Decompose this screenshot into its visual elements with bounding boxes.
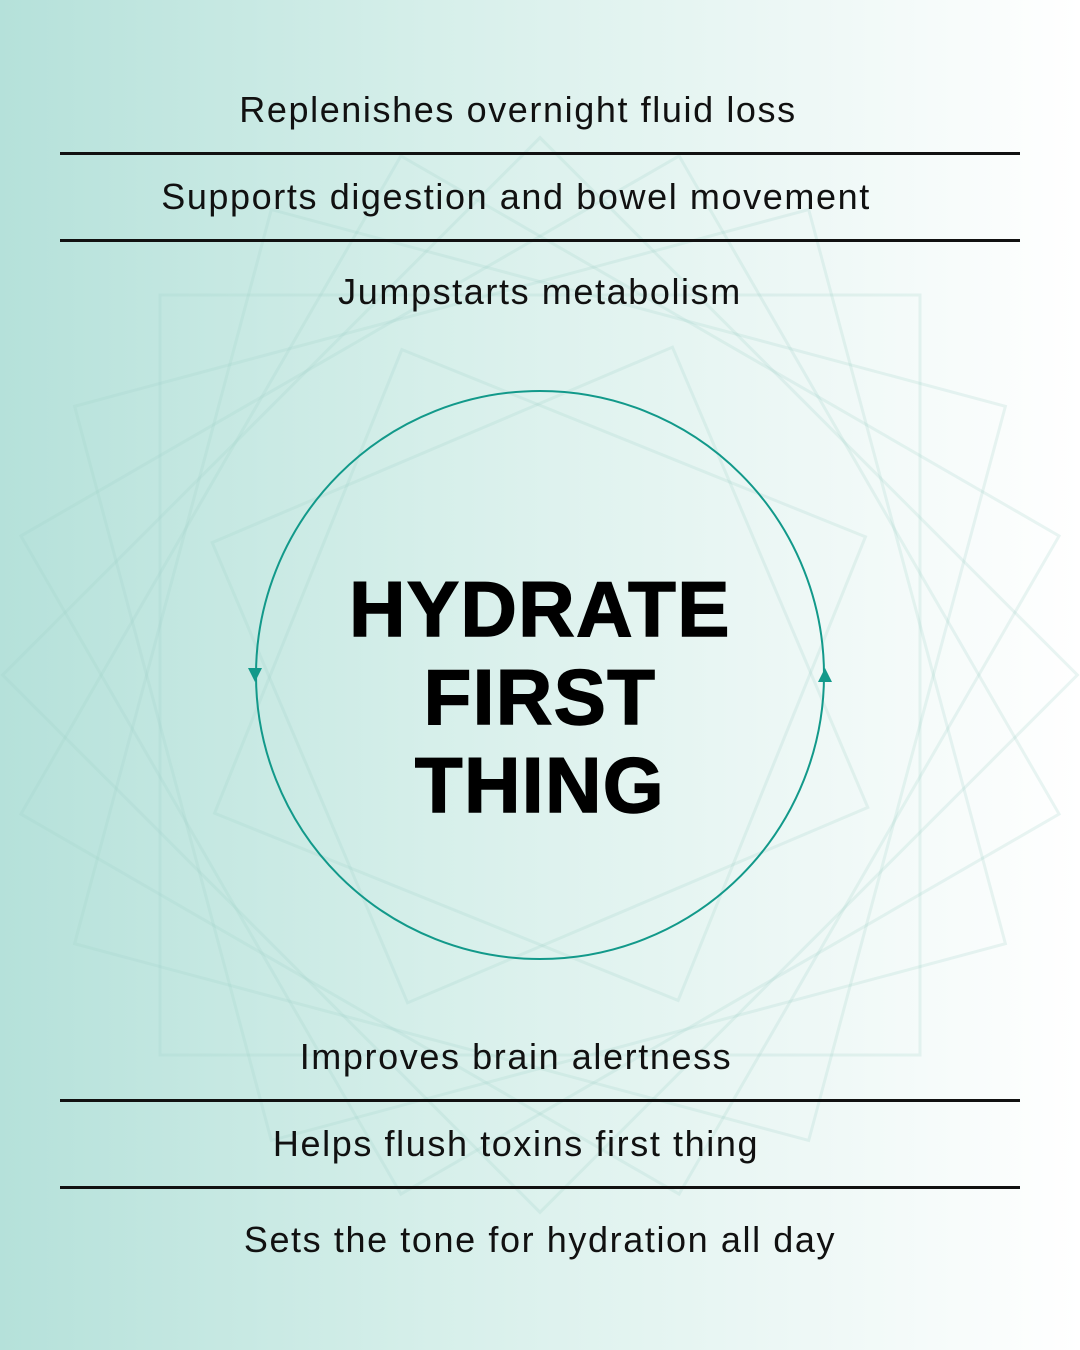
- text: benefit 5: Helps flush toxins first thing: [273, 1123, 759, 1164]
- circle with arrows: [248, 390, 832, 960]
- title: THING: [415, 741, 665, 829]
- title: [349, 565, 731, 829]
- text: benefit 6: Sets the tone for hydration all day: [244, 1219, 836, 1260]
- title: FIRST: [424, 653, 656, 741]
- text: benefit 4: Improves brain alertness: [300, 1036, 732, 1077]
- title: HYDRATE: [349, 565, 731, 653]
- text: benefit 3: Jumpstarts metabolism: [338, 271, 742, 312]
- text: benefit 1: Replenishes overnight fluid loss: [239, 89, 797, 130]
- text: benefit 2: Supports digestion and bowel movement: [161, 176, 871, 217]
